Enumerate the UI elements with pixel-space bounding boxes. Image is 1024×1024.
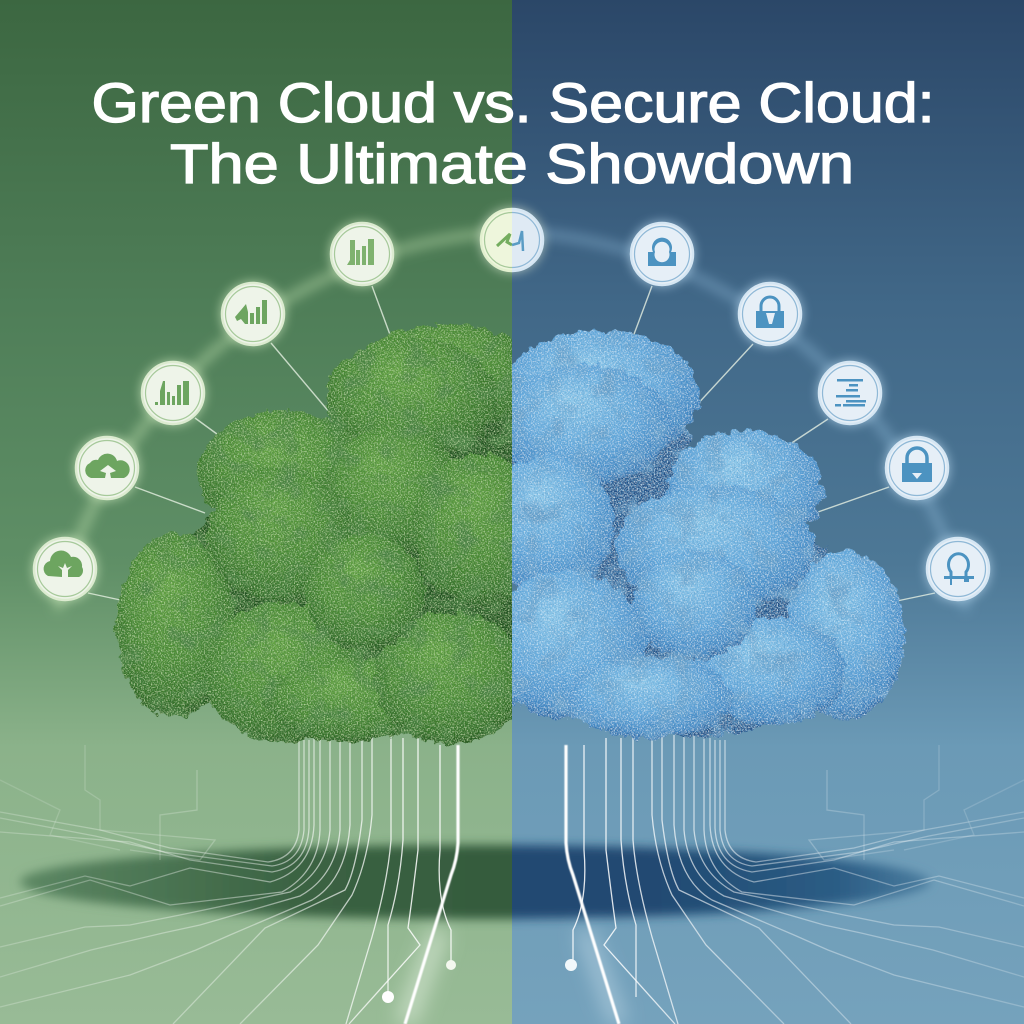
trace end node xyxy=(565,959,577,971)
icon: padlock large xyxy=(884,435,950,501)
title line 1: Green Cloud vs. Secure Cloud: xyxy=(92,71,934,134)
ground shadow xyxy=(20,845,930,919)
icon row xyxy=(32,207,991,602)
panel: blue half background xyxy=(512,0,1024,1024)
title xyxy=(92,71,934,195)
trace end node xyxy=(446,960,456,970)
icon: omega shield xyxy=(925,536,991,602)
icon: padlock wide xyxy=(629,221,695,287)
connector lines xyxy=(88,286,935,602)
circuit traces xyxy=(0,732,1024,1024)
icon: central split badge xyxy=(479,207,545,273)
icon: padlock xyxy=(737,281,803,347)
icon: green column chart xyxy=(329,221,395,287)
title line 2: The Ultimate Showdown xyxy=(170,132,854,195)
icon: green signal chart xyxy=(220,281,286,347)
glowing arc: blue xyxy=(512,232,966,610)
icon: green bar chart xyxy=(140,360,206,426)
bright trace: right xyxy=(566,745,619,1024)
floor glow: left xyxy=(405,930,440,1024)
icon: green cloud with tree xyxy=(32,536,98,602)
icon: text lines xyxy=(817,360,883,426)
glowing arc: green xyxy=(58,232,512,610)
panel: green half background xyxy=(0,0,512,1024)
trace end node xyxy=(382,991,394,1003)
green cloud xyxy=(116,324,548,744)
bright trace: left xyxy=(405,745,458,1024)
floor glow: right xyxy=(584,930,619,1024)
icon: green cloud with tree 2 xyxy=(74,435,140,501)
blue cloud xyxy=(482,330,905,738)
